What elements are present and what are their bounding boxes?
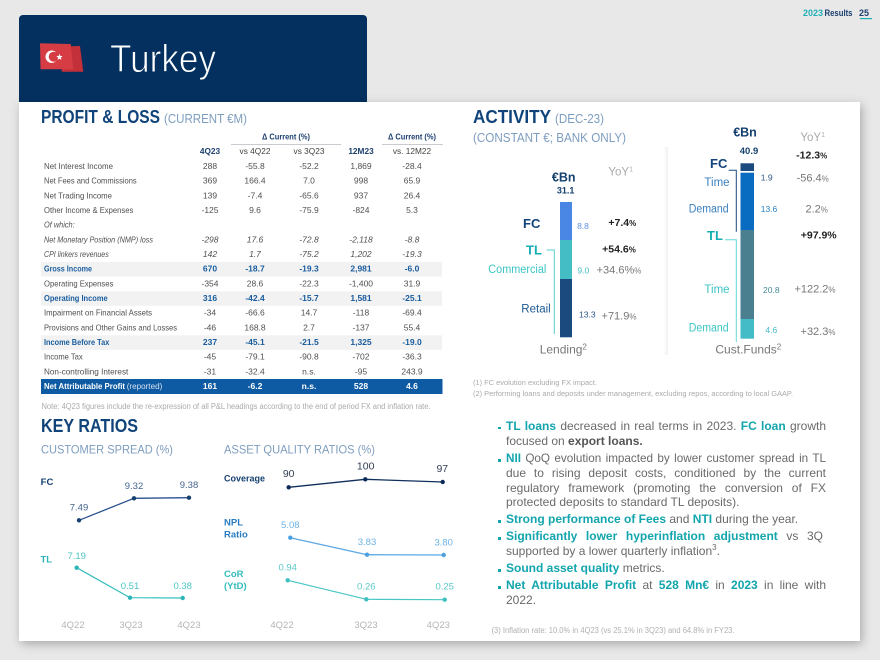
text: Sound asset quality metrics. bbox=[506, 561, 665, 575]
row: gross income: 670 bbox=[203, 264, 217, 274]
title text: Turkey bbox=[110, 38, 216, 81]
row: operating expenses: 28.6 bbox=[247, 278, 264, 288]
table header: 12M23 bbox=[348, 146, 374, 156]
row: net interest income: -52.2 bbox=[299, 161, 319, 171]
chart: customer funds stacked bar: 2 bbox=[777, 342, 782, 352]
chart: customer spread bbox=[40, 477, 201, 631]
row: income tax bbox=[44, 352, 422, 362]
text: regulatory framework (promoting the conversion of FX bbox=[506, 481, 826, 495]
row: other income: -125 bbox=[201, 205, 219, 215]
row: operating expenses: -22.3 bbox=[299, 278, 319, 288]
axis labels: 4Q23 bbox=[427, 620, 450, 631]
panel: key ratios bbox=[40, 416, 454, 631]
row: income before tax: -45.1 bbox=[245, 337, 265, 347]
row: impairment: -66.6 bbox=[245, 308, 265, 318]
series: coverage bbox=[224, 460, 448, 489]
highlight row backgrounds bbox=[41, 262, 442, 350]
row: nmp loss: -72.8 bbox=[299, 234, 319, 244]
chart: customer funds stacked bar: 40.9 bbox=[740, 146, 758, 157]
row: other income: -75.9 bbox=[299, 205, 319, 215]
chart: customer funds stacked bar: -56.4% bbox=[797, 172, 829, 184]
row: operating expenses: -354 bbox=[201, 278, 219, 288]
row: nmp loss bbox=[44, 234, 420, 244]
table header: vs 3Q23 bbox=[294, 146, 325, 156]
row: provisions: -46 bbox=[204, 322, 216, 332]
chart: customer funds stacked bar: +122.2% bbox=[794, 284, 836, 296]
chart: asset quality bbox=[224, 460, 454, 631]
row: net attributable profit: 4.6 bbox=[406, 381, 418, 391]
heading: activity: (CONSTANT €; BANK ONLY) bbox=[473, 130, 626, 145]
chart: lending stacked bar: 13.3 bbox=[579, 310, 596, 320]
row: income tax: Income Tax bbox=[44, 352, 83, 362]
row: non-controlling interest: -31 bbox=[204, 366, 216, 376]
chart: lending stacked bar: FC bbox=[523, 216, 541, 231]
series: FC: 7.49 bbox=[70, 502, 88, 514]
row: impairment bbox=[44, 308, 422, 318]
subheading: customer spread: CUSTOMER SPREAD (%) bbox=[41, 442, 173, 456]
row: nmp loss: Net Monetary Position (NMP) loss bbox=[44, 234, 154, 244]
chart: customer funds stacked bar: 1 bbox=[821, 132, 825, 139]
series: cost of risk: CoR bbox=[224, 569, 244, 580]
row: gross income: -19.3 bbox=[299, 264, 319, 274]
text: TL loans decreased in real terms in 2023. FC loan growth bbox=[506, 419, 826, 433]
row: net attributable profit bbox=[41, 379, 442, 394]
chart: lending stacked bar: 31.1 bbox=[557, 186, 574, 196]
row: gross income: -6.0 bbox=[405, 264, 420, 274]
chart: customer funds stacked bar: 1.9 bbox=[761, 172, 773, 182]
row: impairment: 14.7 bbox=[301, 308, 318, 318]
chart: lending stacked bar: 1 bbox=[629, 166, 633, 174]
row: other income: 5.3 bbox=[406, 205, 418, 215]
chart: lending stacked bar: 8.8 bbox=[577, 221, 589, 231]
table header: 4Q23 bbox=[200, 146, 221, 156]
text: NII QoQ evolution impacted by lower customer spread in TL bbox=[506, 452, 826, 465]
chart: customer funds stacked bar: Demand bbox=[689, 322, 729, 334]
heading: activity: (DEC-23) bbox=[555, 111, 604, 126]
chart: customer funds stacked bar: TL bbox=[707, 228, 723, 243]
row: income tax: -90.8 bbox=[299, 352, 319, 362]
row: income before tax: -19.0 bbox=[402, 337, 422, 347]
row: of which: Of which: bbox=[44, 220, 75, 230]
series: NPL ratio: 3.83 bbox=[358, 537, 376, 548]
row: net trading: -7.4 bbox=[248, 190, 263, 200]
row: gross income bbox=[44, 264, 420, 274]
chart: customer funds stacked bar: Cust.Funds bbox=[715, 342, 777, 356]
chart: lending stacked bar: TL bbox=[526, 242, 542, 258]
row: non-controlling interest: -95 bbox=[355, 366, 367, 376]
row: cpi linkers: -75.2 bbox=[299, 249, 319, 259]
series: coverage: 90 bbox=[283, 468, 295, 480]
row: net trading bbox=[44, 190, 421, 200]
text: Strong performance of Fees and NTI during the year. bbox=[506, 512, 798, 526]
row: gross income: -18.7 bbox=[245, 264, 265, 274]
row: operating income: -42.4 bbox=[245, 293, 265, 303]
title banner bbox=[19, 15, 367, 115]
table header: Δ Current (%) bbox=[262, 132, 310, 142]
row: provisions: Provisions and Other Gains and Losses bbox=[44, 322, 177, 332]
main white panel bbox=[19, 102, 860, 641]
row: impairment: Impairment on Financial Assets bbox=[44, 308, 152, 318]
row: net interest income: 288 bbox=[203, 161, 217, 171]
chart: customer funds stacked bar: 13.6 bbox=[761, 204, 778, 214]
row: operating income: 1,581 bbox=[350, 293, 372, 303]
row: net attributable profit: Net Attributable Profit bbox=[44, 381, 125, 391]
series: FC bbox=[41, 477, 198, 522]
axis labels: 3Q23 bbox=[354, 620, 378, 631]
row: gross income: Gross Income bbox=[44, 264, 92, 274]
row: non-controlling interest bbox=[44, 366, 423, 376]
text: supported by a lower quarterly inflation3. bbox=[506, 543, 720, 558]
chart: customer funds stacked bar: +97.9% bbox=[801, 230, 837, 242]
row: net fees bbox=[44, 176, 421, 186]
table rows bbox=[41, 161, 442, 394]
chart: lending stacked bar: +71.9% bbox=[602, 310, 636, 322]
chart: lending stacked bar: 9.0 bbox=[577, 266, 589, 276]
row: net attributable profit: -6.2 bbox=[248, 381, 263, 391]
chart: customer funds stacked bar: +32.3% bbox=[801, 326, 835, 338]
row: provisions: 55.4 bbox=[404, 322, 421, 332]
row: provisions bbox=[44, 322, 421, 332]
footnote 3: (3) Inflation rate: 10.0% in 4Q23 (vs 25.1% in 3Q23) and 64.8% in FY23. bbox=[492, 626, 734, 635]
text: focused on export loans. bbox=[506, 434, 643, 448]
row: provisions: 168.8 bbox=[244, 322, 266, 332]
chart: lending stacked bar: Retail bbox=[521, 304, 551, 316]
chart: lending stacked bar: YoY bbox=[608, 166, 629, 178]
table header: Δ Current (%) bbox=[388, 132, 436, 142]
chart: customer funds stacked bar: €Bn bbox=[733, 126, 757, 140]
row: provisions: 2.7 bbox=[303, 322, 315, 332]
series: cost of risk bbox=[224, 562, 454, 602]
row: net interest income: -55.8 bbox=[245, 161, 265, 171]
text: Net Attributable Profit at 528 Mn€ in 2023 in line with bbox=[506, 578, 826, 592]
row: operating expenses: 31.9 bbox=[404, 278, 421, 288]
row: non-controlling interest: -32.4 bbox=[245, 366, 265, 376]
axis labels: 3Q23 bbox=[119, 620, 143, 631]
chart: customer funds stacked bar: YoY bbox=[800, 132, 821, 144]
row: net fees: 998 bbox=[354, 176, 368, 186]
row: operating income: Operating Income bbox=[44, 293, 108, 303]
row: net trading: Net Trading Income bbox=[44, 190, 112, 200]
row: income before tax: -21.5 bbox=[299, 337, 319, 347]
series: FC: FC bbox=[41, 477, 53, 488]
heading: profit and loss bbox=[41, 107, 247, 127]
text: 2022. bbox=[506, 593, 536, 607]
divider shadow bbox=[664, 147, 668, 355]
series: FC: 9.38 bbox=[180, 480, 198, 491]
row: net attributable profit: n.s. bbox=[302, 381, 316, 391]
chart: lending stacked bar: +54.6% bbox=[602, 244, 636, 256]
series: NPL ratio: Ratio bbox=[224, 530, 248, 540]
row: net interest income: -28.4 bbox=[402, 161, 422, 171]
row: impairment: -69.4 bbox=[402, 308, 422, 318]
footnotes bbox=[473, 378, 793, 398]
row: operating expenses bbox=[44, 278, 421, 288]
row: net trading: -65.6 bbox=[299, 190, 319, 200]
table header bbox=[200, 132, 443, 156]
row: net attributable profit: 161 bbox=[203, 381, 217, 391]
text: Significantly lower hyperinflation adjustment vs 3Q bbox=[506, 529, 823, 543]
row: net interest income: 1,869 bbox=[350, 161, 372, 171]
row: impairment: -34 bbox=[204, 308, 216, 318]
header: results and page number: Results bbox=[824, 8, 852, 18]
row: net fees: Net Fees and Commissions bbox=[44, 176, 137, 186]
row: net fees: 65.9 bbox=[404, 176, 421, 186]
row: nmp loss: 17.6 bbox=[247, 234, 264, 244]
axis labels: 4Q22 bbox=[270, 620, 294, 631]
series: cost of risk: 0.94 bbox=[278, 562, 297, 574]
chart: lending stacked bar: Lending bbox=[540, 342, 582, 356]
row: income tax: -702 bbox=[352, 352, 370, 362]
chart: customer funds stacked bar: -12.3% bbox=[796, 150, 827, 162]
row: gross income: 2,981 bbox=[350, 264, 372, 274]
footnotes: (1) FC evolution excluding FX impact. bbox=[473, 378, 597, 387]
note: Note: 4Q23 figures include the re-expression of all P&L headings according to the end of period FX and inflation rate. bbox=[42, 402, 430, 411]
row: cpi linkers: 1,202 bbox=[350, 249, 372, 259]
subheading: asset quality: ASSET QUALITY RATIOS (%) bbox=[224, 442, 375, 456]
row: non-controlling interest: Non-controlling Interest bbox=[44, 366, 129, 376]
chart: customer funds stacked bar: Demand bbox=[689, 204, 729, 216]
row: income before tax: 237 bbox=[203, 337, 217, 347]
chart: lending stacked bar: +34.6%% bbox=[597, 264, 641, 276]
row: net interest income: Net Interest Income bbox=[44, 161, 113, 171]
series: FC: 9.32 bbox=[125, 481, 143, 492]
row: other income bbox=[44, 205, 418, 215]
row: cpi linkers: CPI linkers revenues bbox=[44, 249, 109, 259]
footnotes: (2) Performing loans and deposits under management, excluding repos, according to local GAAP. bbox=[473, 389, 793, 398]
series: coverage: 100 bbox=[357, 460, 375, 472]
axis labels: 4Q23 bbox=[177, 620, 201, 631]
chart: customer funds stacked bar: 4.6 bbox=[765, 325, 777, 335]
row: nmp loss: -2,118 bbox=[349, 234, 373, 244]
row: net trading: 937 bbox=[354, 190, 368, 200]
table header: vs 4Q22 bbox=[240, 146, 271, 156]
series: cost of risk: (YtD) bbox=[224, 581, 247, 592]
chart: customer funds stacked bar: Time bbox=[704, 284, 730, 296]
heading: profit and loss: PROFIT & LOSS bbox=[41, 107, 160, 127]
row: operating expenses: -1,400 bbox=[349, 278, 373, 288]
series: coverage: 97 bbox=[436, 463, 448, 475]
chart: lending stacked bar: +7.4% bbox=[608, 217, 636, 229]
row: net trading: 26.4 bbox=[404, 190, 421, 200]
series: TL bbox=[40, 551, 192, 600]
commentary bullets bbox=[498, 419, 826, 607]
row: income before tax: 1,325 bbox=[350, 337, 372, 347]
row: net fees: 7.0 bbox=[303, 176, 315, 186]
series: TL: 0.51 bbox=[121, 581, 139, 592]
row: cpi linkers: 1.7 bbox=[249, 249, 261, 259]
chart: customer funds stacked bar: 2.2% bbox=[805, 204, 828, 216]
header: results and page number bbox=[803, 8, 872, 19]
row: net fees: 166.4 bbox=[244, 176, 266, 186]
row: net fees: 369 bbox=[203, 176, 217, 186]
row: net attributable profit: 528 bbox=[354, 381, 368, 391]
header: results and page number: 2023 bbox=[803, 8, 823, 18]
chart: customer funds stacked bar: Time bbox=[704, 177, 730, 189]
table header: vs. 12M22 bbox=[393, 146, 432, 156]
row: other income: -824 bbox=[352, 205, 370, 215]
chart: lending stacked bar: €Bn bbox=[552, 170, 576, 184]
row: net trading: 139 bbox=[203, 190, 217, 200]
heading: key ratios: KEY RATIOS bbox=[41, 416, 138, 436]
row: income before tax: Income Before Tax bbox=[44, 337, 110, 347]
chart: lending stacked bar: 2 bbox=[582, 342, 587, 352]
row: net interest income bbox=[44, 161, 422, 171]
row: cpi linkers: 142 bbox=[203, 249, 217, 259]
series: cost of risk: 0.26 bbox=[357, 582, 376, 592]
heading: activity bbox=[473, 107, 626, 145]
row: cpi linkers bbox=[44, 249, 422, 259]
text: due to rising deposit costs, conditioned by the current bbox=[506, 466, 826, 480]
axis labels bbox=[61, 620, 201, 631]
series: TL: 0.38 bbox=[173, 581, 192, 592]
axis labels: 4Q22 bbox=[61, 620, 85, 631]
row: nmp loss: -8.8 bbox=[405, 234, 420, 244]
row: income before tax bbox=[44, 337, 422, 347]
row: operating income bbox=[44, 293, 422, 303]
chart: customer funds stacked bar bbox=[689, 126, 837, 356]
row: cpi linkers: -19.3 bbox=[402, 249, 422, 259]
header: results and page number: 25 bbox=[859, 8, 869, 18]
chart: customer funds stacked bar: 20.8 bbox=[763, 285, 780, 295]
series: NPL ratio: 3.80 bbox=[434, 538, 453, 548]
row: other income: Other Income & Expenses bbox=[44, 205, 133, 215]
series: TL: 7.19 bbox=[67, 551, 86, 562]
axis labels bbox=[270, 620, 450, 631]
text: protected deposits to standard TL deposits). bbox=[506, 495, 739, 509]
series: TL: TL bbox=[40, 554, 52, 566]
row: operating income: -15.7 bbox=[299, 293, 319, 303]
panel: activity bbox=[473, 107, 837, 398]
panel: profit and loss bbox=[41, 107, 443, 411]
series: NPL ratio: NPL bbox=[224, 518, 243, 528]
heading: profit and loss: (CURRENT €M) bbox=[164, 111, 247, 126]
row: non-controlling interest: n.s. bbox=[302, 366, 316, 376]
series: NPL ratio bbox=[224, 518, 453, 557]
row: impairment: -118 bbox=[353, 308, 369, 318]
series: NPL ratio: 5.08 bbox=[281, 520, 300, 531]
row: operating income: 316 bbox=[203, 293, 217, 303]
series: cost of risk: 0.25 bbox=[435, 582, 454, 592]
row: operating income: -25.1 bbox=[402, 293, 422, 303]
row: net attributable profit: (reported) bbox=[127, 381, 162, 391]
icon: Turkish flag bbox=[40, 43, 83, 72]
row: other income: 9.6 bbox=[249, 205, 261, 215]
row: income tax: -36.3 bbox=[402, 352, 422, 362]
row: operating expenses: Operating Expenses bbox=[44, 278, 113, 288]
row: income tax: -79.1 bbox=[245, 352, 265, 362]
chart: customer funds stacked bar: FC bbox=[710, 156, 728, 171]
row: income tax: -45 bbox=[204, 352, 216, 362]
row: provisions: -137 bbox=[352, 322, 370, 332]
heading: activity: ACTIVITY bbox=[473, 107, 551, 127]
chart: lending stacked bar: Commercial bbox=[488, 264, 546, 276]
row: nmp loss: -298 bbox=[201, 234, 219, 244]
series: coverage: Coverage bbox=[224, 474, 265, 484]
row: non-controlling interest: 243.9 bbox=[401, 366, 423, 376]
chart: lending stacked bar bbox=[488, 166, 641, 356]
